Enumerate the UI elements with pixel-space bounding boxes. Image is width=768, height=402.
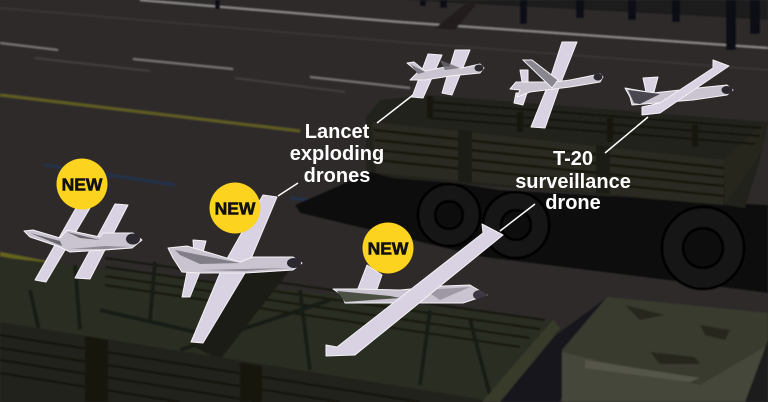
- label: Lancet exploding drones: drones: [304, 165, 370, 187]
- drone: small H-wing Lancet: [407, 50, 484, 98]
- label: T-20 surveillance drone: T-20: [553, 148, 593, 170]
- badge: NEW right: [362, 222, 414, 274]
- label: T-20 surveillance drone: drone: [545, 192, 601, 214]
- drone: top centre Lancet: [510, 42, 603, 128]
- label: Lancet exploding drones: [290, 121, 384, 187]
- top truck bed: [366, 95, 768, 208]
- top truck wheels: [418, 184, 744, 289]
- badge: NEW right: NEW: [368, 238, 409, 258]
- drone: middle new Lancet: [168, 195, 302, 343]
- label: Lancet exploding drones: Lancet: [305, 121, 370, 143]
- label: Lancet exploding drones: exploding: [290, 143, 384, 165]
- top truck shadow: [295, 170, 768, 293]
- leader lines: [278, 95, 648, 231]
- badge: NEW middle: [210, 182, 260, 234]
- drone: new T-20: [326, 224, 503, 356]
- soldiers at top: [215, 0, 760, 50]
- tank at bottom right: [500, 297, 768, 402]
- drone: top right T-20: [625, 60, 733, 115]
- bottom truck bed: [0, 250, 560, 402]
- badge: NEW left: [56, 158, 108, 210]
- road markings: [0, 0, 768, 263]
- badge: NEW left: NEW: [62, 174, 103, 194]
- label: T-20 surveillance drone: [515, 148, 631, 214]
- drone: left new H-wing Lancet: [24, 204, 142, 282]
- badge: NEW middle: NEW: [215, 198, 256, 218]
- label: T-20 surveillance drone: surveillance: [515, 171, 631, 193]
